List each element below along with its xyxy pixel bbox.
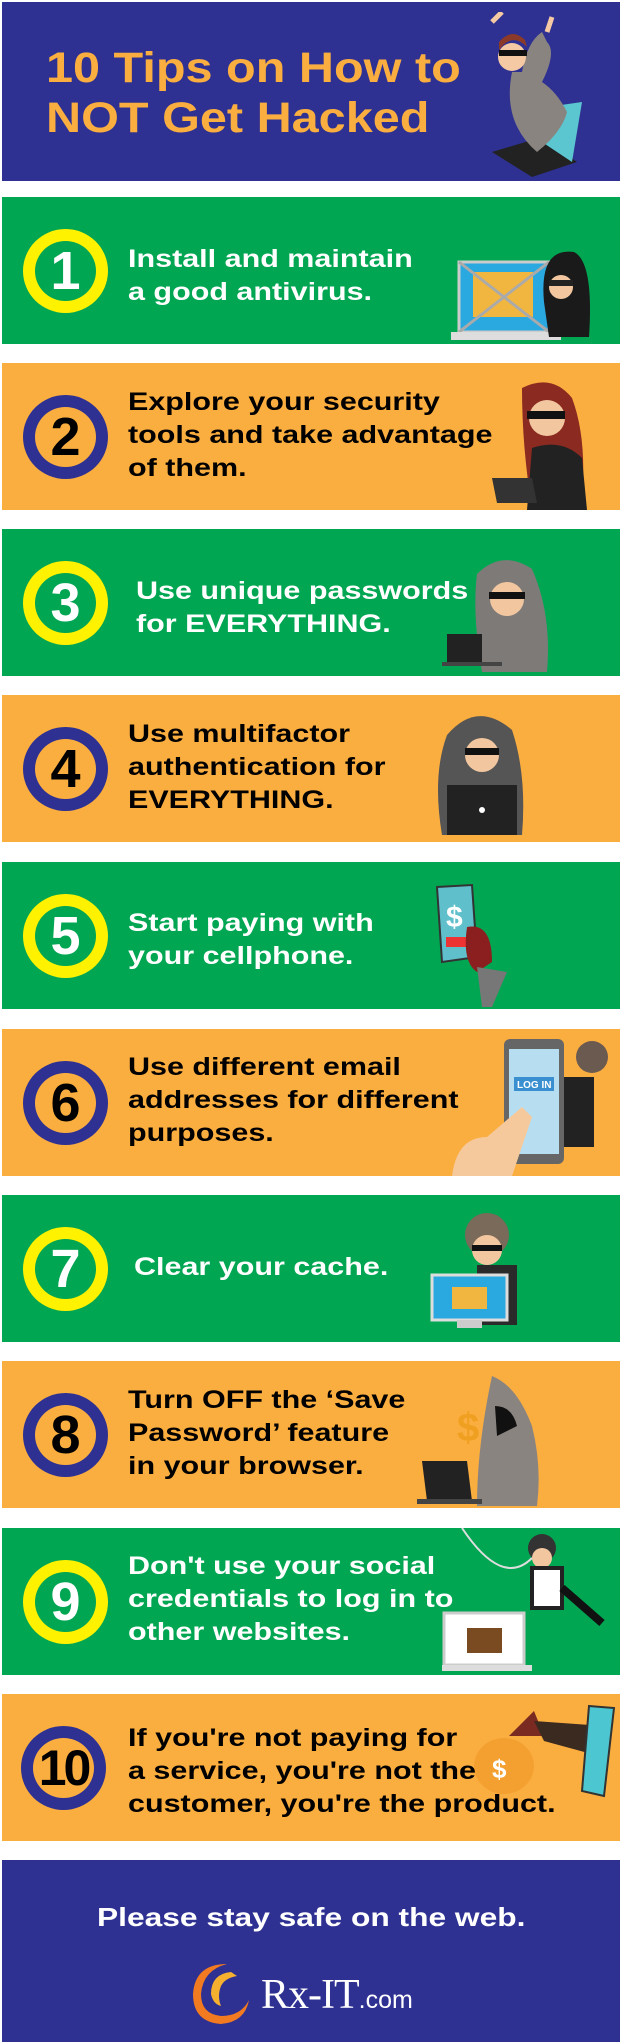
text: other websites. xyxy=(128,1618,350,1646)
text: Don't use your social xyxy=(128,1552,435,1580)
number 3 xyxy=(23,561,108,645)
number 3: 3 xyxy=(50,573,81,633)
header xyxy=(2,2,620,181)
number 1: 1 xyxy=(50,241,81,301)
text: If you're not paying for xyxy=(128,1724,457,1752)
text: a service, you're not the xyxy=(128,1757,476,1785)
text: EVERYTHING. xyxy=(128,786,334,814)
icon: hacker woman with laptop xyxy=(492,382,587,510)
panel: tip 5 xyxy=(2,862,620,1009)
panel: tip 7 xyxy=(2,1195,620,1342)
text xyxy=(136,577,468,638)
footer text: Please stay safe on the web. xyxy=(97,1902,525,1932)
logo: Rx-IT.com xyxy=(193,1964,413,2024)
text: for EVERYTHING. xyxy=(136,610,391,638)
icon: hacker jumping out of laptop xyxy=(490,12,582,177)
icon: hand holding phone with dollar xyxy=(436,884,507,1007)
number 10 xyxy=(21,1726,106,1810)
title: 10 Tips on How to xyxy=(46,44,461,92)
icon: swirl xyxy=(193,1964,249,2024)
icon: money bag pulled from phone xyxy=(474,1704,616,1798)
panel: tip 2 xyxy=(2,363,620,510)
panel: tip 4 xyxy=(2,695,620,842)
number 2: 2 xyxy=(50,407,81,467)
text xyxy=(128,909,374,970)
text: Use multifactor xyxy=(128,720,350,748)
title: NOT Get Hacked xyxy=(46,94,429,142)
panel: tip 9 xyxy=(2,1528,620,1675)
text: Use different email xyxy=(128,1053,401,1081)
icon: hooded figure with laptop and dollar xyxy=(417,1376,539,1506)
text xyxy=(128,1552,453,1646)
footer xyxy=(2,1860,620,2042)
text: a good antivirus. xyxy=(128,278,372,306)
number 6 xyxy=(23,1061,108,1145)
brand text: Rx-IT.com xyxy=(261,1972,413,2018)
text xyxy=(128,1386,405,1480)
icon: phone login with spy: LOG IN xyxy=(517,1080,551,1091)
title xyxy=(46,44,461,142)
icon: hooded figure with laptop and dollar: $ xyxy=(457,1406,479,1450)
text: customer, you're the product. xyxy=(128,1790,556,1818)
icon: hooded hacker with laptop xyxy=(438,716,524,835)
text: Turn OFF the ‘Save xyxy=(128,1386,405,1414)
icon: hooded hacker with laptop xyxy=(442,560,548,672)
number 4 xyxy=(23,727,108,811)
number 6: 6 xyxy=(50,1073,81,1133)
number 5: 5 xyxy=(50,906,81,966)
number 10: 10 xyxy=(39,1740,88,1796)
text: Start paying with xyxy=(128,909,374,937)
text xyxy=(128,720,386,814)
text: Clear your cache. xyxy=(134,1253,388,1281)
text xyxy=(128,1053,459,1147)
text: of them. xyxy=(128,454,247,482)
number 2 xyxy=(23,395,108,479)
text xyxy=(128,245,413,306)
panel: tip 3 xyxy=(2,529,620,676)
text: addresses for different xyxy=(128,1086,459,1114)
text xyxy=(128,1724,556,1818)
number 1 xyxy=(23,229,108,313)
text: Use unique passwords xyxy=(136,577,468,605)
icon: phone login with spy xyxy=(452,1039,608,1176)
panel: tip 8 xyxy=(2,1361,620,1508)
panel: tip 10 xyxy=(2,1694,620,1841)
icon: money bag pulled from phone: $ xyxy=(492,1754,507,1784)
number 8 xyxy=(23,1393,108,1477)
icon: burglar on rope with laptop wallet xyxy=(442,1528,604,1671)
panel: tip 6 xyxy=(2,1029,620,1176)
number 4: 4 xyxy=(50,739,81,799)
text: Password’ feature xyxy=(128,1419,389,1447)
text: tools and take advantage xyxy=(128,421,492,449)
text: your cellphone. xyxy=(128,942,353,970)
text: credentials to log in to xyxy=(128,1585,453,1613)
text: Explore your security xyxy=(128,388,440,416)
text: purposes. xyxy=(128,1119,274,1147)
icon: hand holding phone with dollar: $ xyxy=(446,901,463,934)
text: authentication for xyxy=(128,753,386,781)
number 9 xyxy=(23,1560,108,1644)
number 8: 8 xyxy=(50,1405,81,1465)
number 7 xyxy=(23,1227,108,1311)
number 9: 9 xyxy=(50,1572,81,1632)
icon: hacker with email screen xyxy=(430,1213,517,1328)
number 5 xyxy=(23,894,108,978)
text: in your browser. xyxy=(128,1452,364,1480)
text xyxy=(128,388,492,482)
text: Install and maintain xyxy=(128,245,413,273)
panel: tip 1 xyxy=(2,197,620,344)
number 7: 7 xyxy=(50,1239,81,1299)
icon: chained laptop with hacker xyxy=(451,252,590,340)
